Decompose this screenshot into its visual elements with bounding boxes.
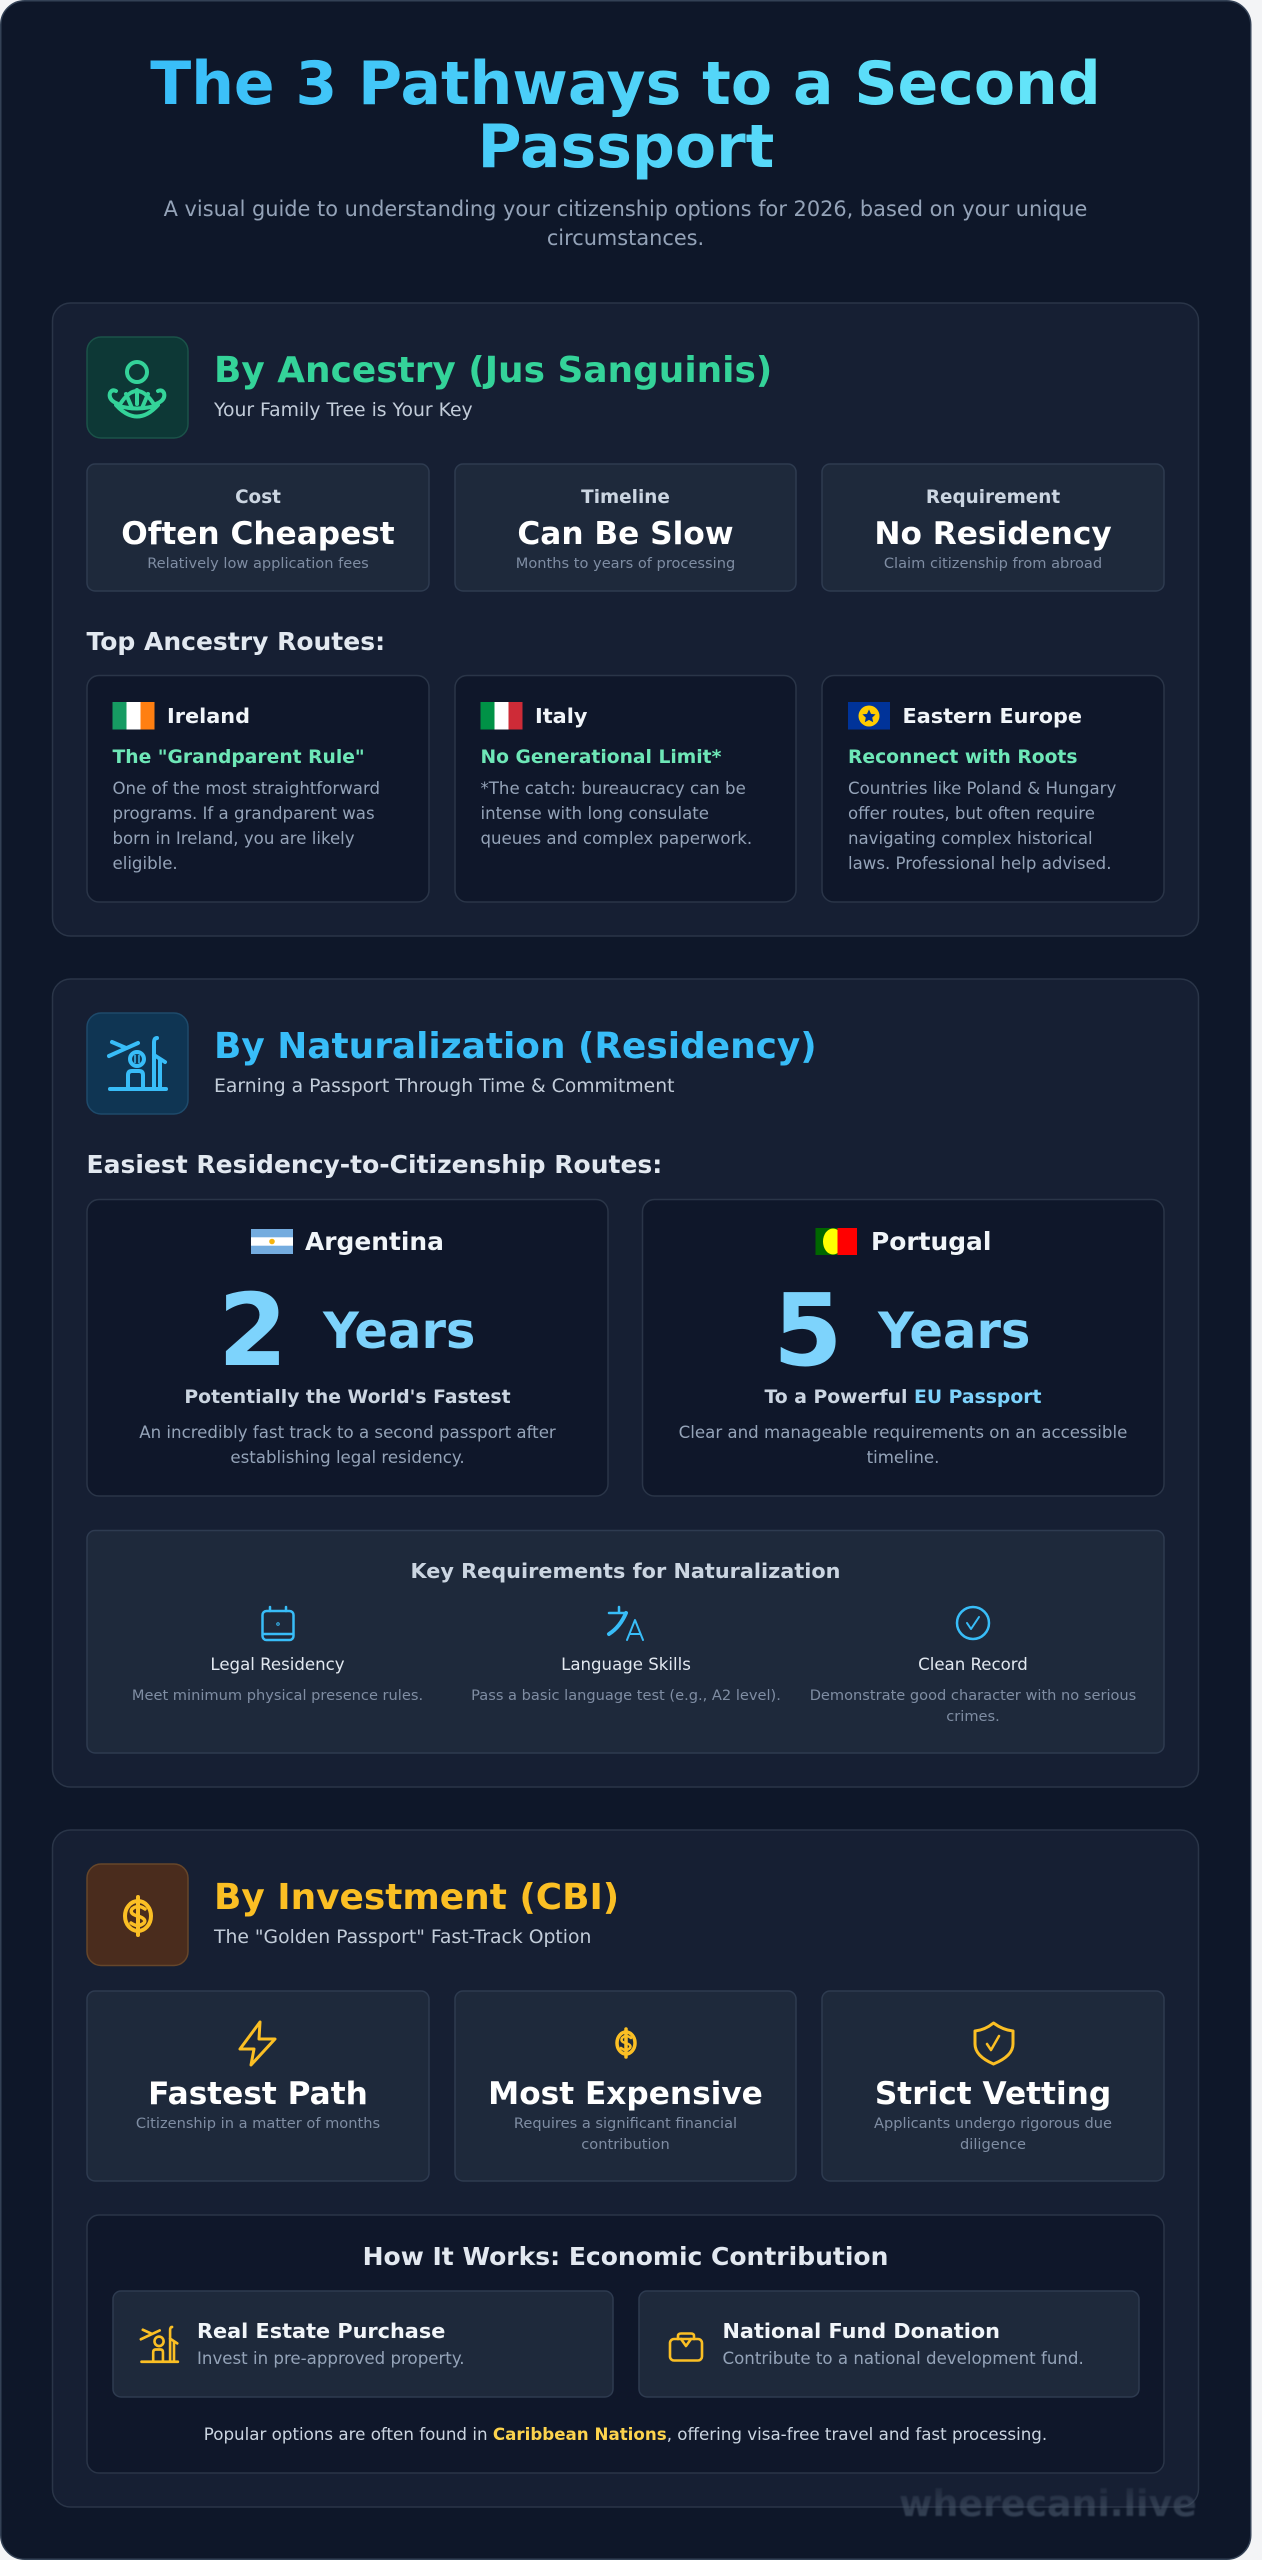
route card: ireland: The "Grandparent Rule" (112, 747, 365, 768)
route card: ireland: eligible. (112, 854, 178, 873)
icon: ireland flag (112, 702, 154, 730)
heading: residency routes: Easiest Residency-to-Citizenship Routes: (86, 1150, 662, 1179)
route card: argentina (87, 1200, 608, 1496)
stat card: timeline: Can Be Slow (517, 516, 734, 552)
requirement: clean record: Clean Record (918, 1655, 1028, 1674)
route card: eastern europe: Eastern Europe (902, 704, 1082, 728)
section heading: naturalization: By Naturalization (Residency) (214, 1026, 817, 1067)
title: Passport (478, 112, 774, 182)
icon: italy flag (480, 702, 522, 730)
route card: portugal (642, 1200, 1164, 1496)
panel: how it works (87, 2215, 1164, 2473)
stat card: cost: Often Cheapest (121, 516, 395, 552)
icon: check circle (957, 1607, 989, 1639)
heading: how it works: How It Works: Economic Contribution (363, 2242, 888, 2271)
route card: argentina: establishing legal residency. (230, 1448, 465, 1467)
subtitle: circumstances. (547, 226, 704, 250)
heading: top ancestry routes: Top Ancestry Routes: (86, 627, 385, 656)
route card: italy: intense with long consulate (480, 804, 709, 823)
stat card: requirement: Requirement (926, 487, 1060, 508)
subtitle: A visual guide to understanding your citizenship options for 2026, based on your unique (164, 197, 1087, 221)
route card: portugal: Portugal (871, 1227, 991, 1256)
section tagline: ancestry: Your Family Tree is Your Key (213, 400, 473, 421)
requirement: legal residency: Legal Residency (210, 1655, 345, 1674)
route card: eastern europe: Reconnect with Roots (848, 747, 1078, 768)
stat card: requirement: No Residency (874, 516, 1112, 552)
panel: by investment (52, 1830, 1198, 2507)
icon: eu flag (848, 702, 890, 730)
route card: eastern europe: navigating complex historical (848, 829, 1093, 848)
stat card: timeline: Months to years of processing (516, 555, 735, 572)
option card: national fund: Contribute to a national development fund. (722, 2349, 1084, 2368)
option card: real estate: Real Estate Purchase (197, 2319, 445, 2343)
requirement: language skills: Language Skills (561, 1655, 691, 1674)
icon: briefcase (670, 2334, 702, 2360)
icon: naturalization (87, 1013, 188, 1114)
route card: italy: Italy (535, 704, 588, 728)
option card: real estate (113, 2291, 613, 2397)
route card: italy: queues and complex paperwork. (480, 829, 752, 848)
requirement: clean record (810, 1607, 1136, 1725)
route card: ireland: Ireland (167, 704, 250, 728)
icon: lightning bolt (240, 2022, 275, 2065)
icon: shield check (975, 2023, 1013, 2064)
stat card: requirement (822, 464, 1164, 591)
stat card: cost (87, 464, 429, 591)
route card: portugal: timeline. (867, 1448, 939, 1467)
route card: ireland: One of the most straightforward (112, 779, 380, 798)
route card: portugal: Years (877, 1302, 1030, 1360)
requirement: legal residency: Meet minimum physical presence rules. (132, 1687, 423, 1704)
route card: portugal: 5 (773, 1272, 843, 1389)
requirement: legal residency (132, 1607, 423, 1704)
requirement: language skills: Pass a basic language test (e.g., A2 level). (471, 1687, 781, 1704)
feature card: most expensive: contribution (581, 2136, 670, 2153)
stat card: cost: Cost (235, 487, 281, 508)
panel: by naturalization (52, 979, 1198, 1787)
route card: argentina: Years (322, 1302, 475, 1360)
panel: key requirements (87, 1530, 1164, 1753)
option card: national fund (639, 2291, 1139, 2397)
feature card: most expensive: Most Expensive (488, 2076, 763, 2112)
title (150, 49, 1101, 182)
heading: key requirements: Key Requirements for Naturalization (411, 1559, 840, 1583)
icon: translate (609, 1607, 643, 1640)
route card: eastern europe: laws. Professional help advised. (848, 854, 1111, 873)
feature card: fastest path (87, 1991, 429, 2181)
route card: argentina: An incredibly fast track to a second passport after (139, 1423, 556, 1442)
icon: investment dollar (87, 1864, 188, 1966)
feature card: strict vetting: diligence (960, 2136, 1026, 2153)
route card: eastern europe: Countries like Poland & Hungary (848, 779, 1116, 798)
title: The 3 Pathways to a Second (150, 49, 1101, 119)
panel: by ancestry (52, 303, 1198, 936)
route card: portugal: To a Powerful EU Passport (764, 1387, 1042, 1408)
route card: ireland (87, 676, 429, 902)
stat card: cost: Relatively low application fees (147, 555, 369, 572)
section heading: investment: By Investment (CBI) (214, 1877, 619, 1918)
icon: real estate (141, 2327, 178, 2362)
stat card: timeline: Timeline (581, 487, 670, 508)
feature card: strict vetting (822, 1991, 1164, 2181)
footer note: Popular options are often found in Caribbean Nations, offering visa-free travel and fast processing. (204, 2424, 1047, 2444)
feature card: fastest path: Fastest Path (148, 2076, 368, 2112)
feature card: fastest path: Citizenship in a matter of months (136, 2115, 380, 2132)
section tagline: naturalization: Earning a Passport Through Time & Commitment (214, 1076, 675, 1097)
subtitle (164, 197, 1087, 250)
route card: ireland: born in Ireland, you are likely (112, 829, 355, 848)
route card: eastern europe (822, 676, 1164, 902)
route card: argentina: Argentina (305, 1227, 444, 1256)
stat card: timeline (455, 464, 796, 591)
icon: calendar (262, 1607, 294, 1640)
requirement: language skills (471, 1607, 781, 1704)
icon: argentina flag (251, 1229, 293, 1254)
route card: ireland: programs. If a grandparent was (112, 804, 375, 823)
watermark: wherecani.live (899, 2482, 1197, 2525)
option card: real estate: Invest in pre-approved property. (197, 2349, 465, 2368)
route card: eastern europe: offer routes, but often require (848, 804, 1095, 823)
requirement: clean record: Demonstrate good character with no serious (810, 1687, 1136, 1704)
section heading: ancestry: By Ancestry (Jus Sanguinis) (214, 350, 772, 391)
feature card: most expensive: Requires a significant financial (514, 2115, 737, 2132)
section tagline: investment: The "Golden Passport" Fast-Track Option (213, 1927, 591, 1948)
route card: italy (455, 676, 796, 902)
feature card: strict vetting: Applicants undergo rigorous due (874, 2115, 1112, 2132)
icon: dollar (617, 2029, 635, 2057)
icon: portugal flag (816, 1228, 857, 1255)
option card: national fund: National Fund Donation (722, 2319, 1000, 2343)
route card: argentina: 2 (218, 1272, 288, 1389)
feature card: strict vetting: Strict Vetting (875, 2076, 1111, 2112)
route card: italy: No Generational Limit* (480, 747, 722, 768)
icon: ancestry (87, 337, 188, 438)
feature card: most expensive (455, 1991, 796, 2181)
requirement: clean record: crimes. (946, 1708, 1000, 1725)
stat card: requirement: Claim citizenship from abroad (884, 555, 1102, 572)
route card: portugal: Clear and manageable requirements on an accessible (679, 1423, 1127, 1442)
route card: italy: *The catch: bureaucracy can be (480, 779, 746, 798)
route card: argentina: Potentially the World's Fastest (184, 1387, 511, 1408)
